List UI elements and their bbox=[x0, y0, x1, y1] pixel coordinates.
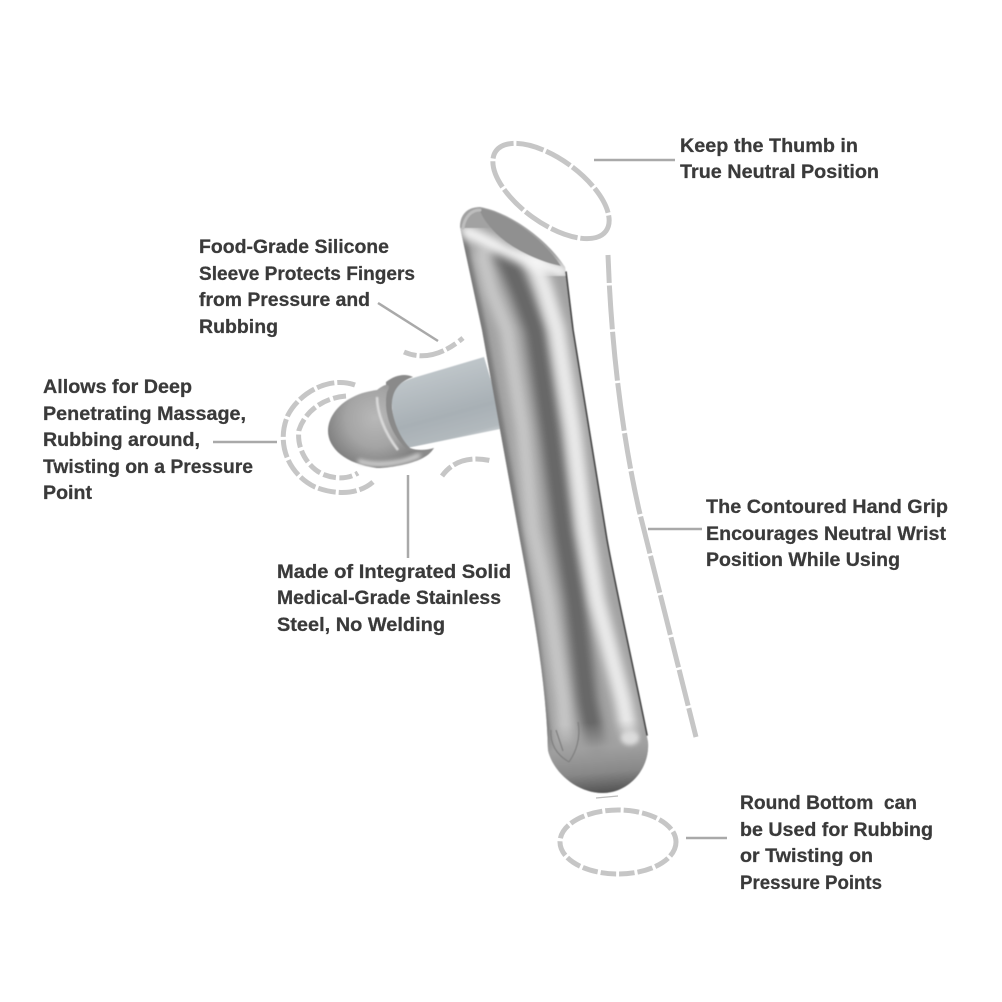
main handle bbox=[460, 206, 649, 794]
reflection marks under handle bbox=[596, 796, 618, 798]
round bottom callout text: Pressure Points bbox=[740, 873, 882, 894]
deep massage callout text: Penetrating Massage, bbox=[43, 404, 246, 425]
right light band bbox=[535, 262, 630, 738]
head lower highlight bbox=[358, 455, 420, 464]
top left rim highlight bbox=[463, 210, 480, 228]
dashed ellipse: round bottom bbox=[560, 810, 676, 874]
hand grip callout text: The Contoured Hand Grip bbox=[706, 497, 948, 518]
deep massage callout text: Point bbox=[43, 483, 93, 504]
stainless steel callout text: Made of Integrated Solid bbox=[277, 562, 511, 583]
handle base bbox=[460, 206, 648, 762]
silicone sleeve bbox=[392, 357, 505, 448]
bottom shading bbox=[548, 722, 648, 794]
hand grip callout text bbox=[706, 497, 948, 571]
hand grip callout text: Encourages Neutral Wrist bbox=[706, 524, 947, 545]
stainless steel callout text bbox=[277, 562, 511, 636]
silicone sleeve callout text: Sleeve Protects Fingers bbox=[199, 264, 415, 285]
silicone sleeve callout text bbox=[199, 237, 415, 338]
deep massage callout text: Rubbing around, bbox=[43, 430, 200, 451]
round bottom callout text bbox=[740, 793, 933, 894]
thumb callout text bbox=[680, 136, 879, 183]
leader lines bbox=[213, 160, 727, 838]
dark band bbox=[505, 255, 596, 745]
deep massage callout text bbox=[43, 377, 253, 504]
silicone sleeve callout text: from Pressure and bbox=[199, 290, 370, 311]
hand grip callout text: Position While Using bbox=[706, 550, 900, 571]
thumb callout text: Keep the Thumb in bbox=[680, 136, 858, 157]
bright shoulder bbox=[466, 232, 563, 272]
steel collar bbox=[385, 375, 434, 464]
bottom right highlight bbox=[621, 731, 639, 745]
left light band bbox=[482, 255, 566, 740]
silicone sleeve callout text: Food-Grade Silicone bbox=[199, 237, 389, 258]
deep massage callout text: Allows for Deep bbox=[43, 377, 192, 398]
dashed arc: silicone sleeve upper bbox=[404, 338, 463, 356]
dashed curve: contoured grip bbox=[608, 255, 696, 737]
stainless steel callout text: Medical-Grade Stainless bbox=[277, 588, 501, 609]
left edge shadow bbox=[462, 235, 548, 750]
collar highlight bbox=[377, 397, 398, 450]
angled top face bbox=[479, 208, 561, 266]
dashed arc: silicone sleeve lower bbox=[442, 459, 496, 476]
steel tip head bbox=[328, 385, 434, 468]
round bottom callout text: Round Bottom can bbox=[740, 793, 917, 814]
round bottom callout text: be Used for Rubbing bbox=[740, 820, 933, 841]
product: massage tool bbox=[328, 200, 660, 800]
dashed arcs: tip massage bbox=[283, 382, 373, 492]
stainless steel callout text: Steel, No Welding bbox=[277, 615, 445, 636]
silicone sleeve callout text: Rubbing bbox=[199, 317, 278, 338]
dashed ellipse: thumb position bbox=[477, 125, 625, 257]
deep massage callout text: Twisting on a Pressure bbox=[43, 457, 253, 478]
right edge dark line bbox=[566, 272, 647, 735]
thumb callout text: True Neutral Position bbox=[680, 162, 879, 183]
heart logo bbox=[551, 722, 579, 762]
round bottom callout text: or Twisting on bbox=[740, 846, 873, 867]
